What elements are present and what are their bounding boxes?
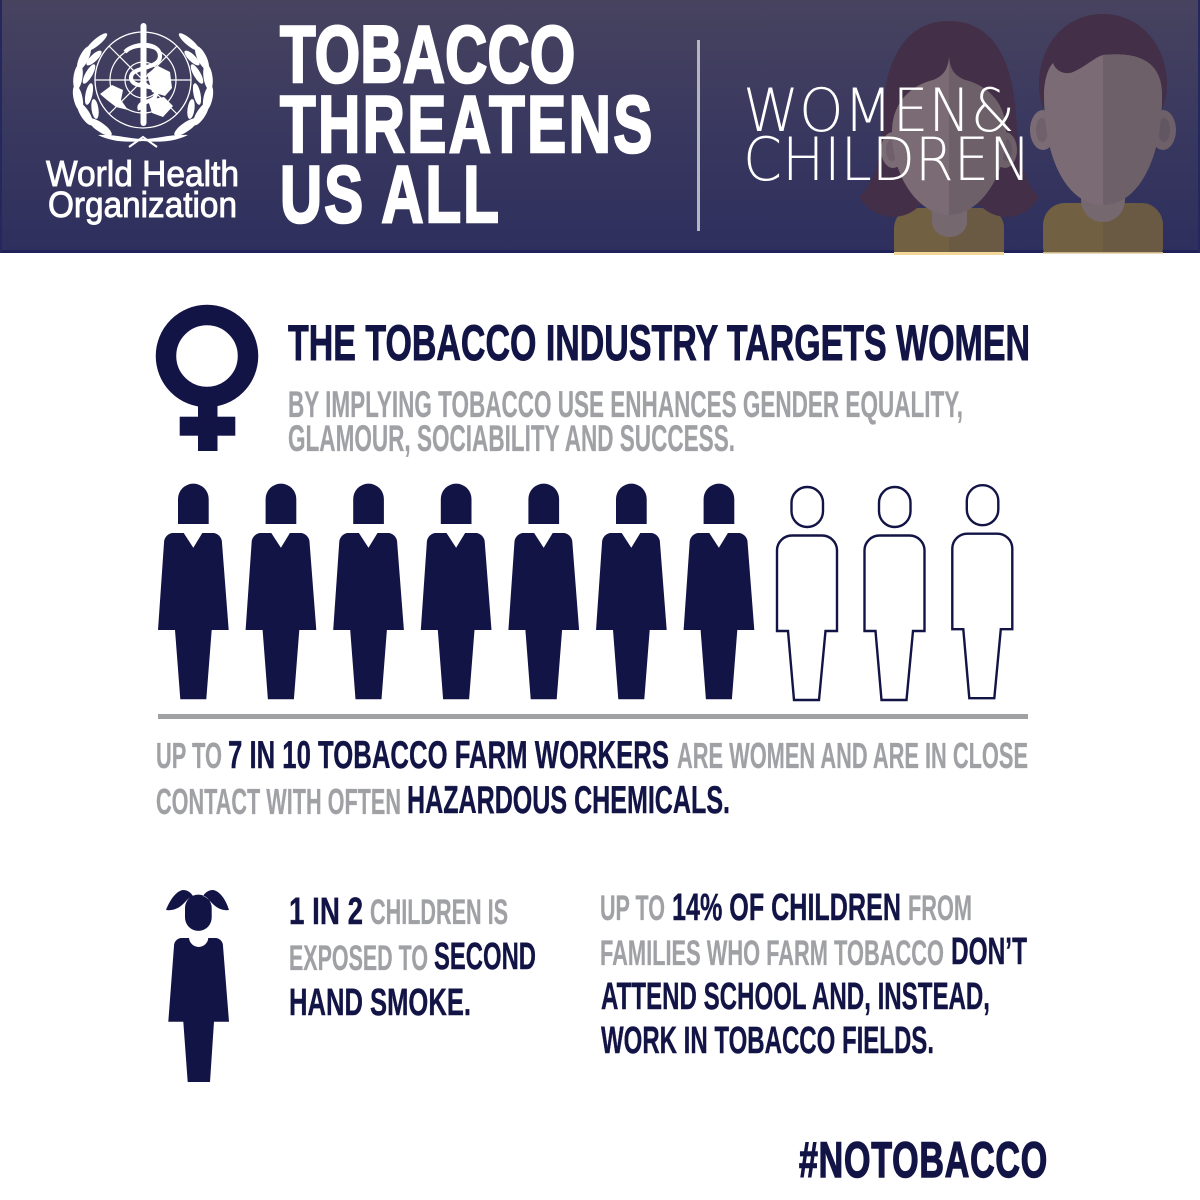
organization name — [46, 153, 239, 225]
text: children farm work — [600, 887, 1027, 1062]
woman filled 3 — [333, 484, 404, 699]
text: farm workers statistic: HAZARDOUS CHEMICALS. — [407, 779, 730, 822]
person outline 9 — [864, 487, 924, 700]
text: farm workers statistic — [156, 734, 1028, 822]
text: farm workers statistic: CONTACT WITH OFTEN — [156, 781, 401, 822]
subtitle: women and children — [743, 76, 1031, 195]
text: second hand smoke: CHILDREN IS — [370, 893, 508, 932]
text: second hand smoke: 1 IN 2 — [289, 891, 363, 933]
text: second hand smoke: HAND SMOKE. — [289, 982, 471, 1024]
icon: girl — [166, 890, 229, 1082]
icon: female symbol — [166, 315, 248, 451]
text: children farm work: WORK IN TOBACCO FIELDS. — [601, 1020, 934, 1062]
WHO emblem — [71, 23, 215, 147]
text: children farm work: DON’T — [951, 931, 1027, 973]
text: children farm work: FROM — [908, 889, 972, 928]
hashtag: #NOTOBACCO — [799, 1133, 1047, 1189]
subtitle: women and children: WOMEN& — [743, 76, 1015, 146]
woman filled 6 — [596, 484, 667, 699]
text: children farm work: UP TO — [600, 889, 665, 928]
text: children farm work: 14% OF CHILDREN — [672, 887, 901, 929]
woman filled 1 — [158, 484, 229, 699]
woman filled 2 — [246, 484, 316, 699]
text: farm workers statistic: 7 IN 10 TOBACCO FARM WORKERS — [228, 734, 669, 777]
title: TOBACCO — [280, 9, 575, 99]
baseline rule — [158, 714, 1028, 719]
illustration: woman — [859, 21, 1039, 268]
subtitle: women and children: CHILDREN — [743, 125, 1031, 195]
text: second hand smoke — [289, 891, 536, 1024]
pictogram: 7 in 10 women — [158, 484, 1012, 700]
text: second hand smoke: EXPOSED TO — [289, 939, 428, 978]
title — [280, 9, 652, 239]
organization name: Organization — [48, 184, 237, 225]
title: US ALL — [280, 149, 499, 239]
woman filled 4 — [421, 484, 492, 699]
text: second hand smoke: SECOND — [434, 936, 536, 978]
text: children farm work: ATTEND SCHOOL AND, INSTEAD, — [601, 976, 990, 1018]
text: farm workers statistic: UP TO — [156, 735, 222, 776]
title: THREATENS — [280, 79, 652, 169]
woman filled 5 — [508, 484, 579, 699]
illustration: boy — [1030, 14, 1176, 268]
text: children farm work: FAMILIES WHO FARM TOBACCO — [600, 934, 944, 973]
subheading text — [288, 384, 963, 459]
header banner — [0, 0, 1200, 268]
person outline 10 — [952, 485, 1012, 698]
organization name: World Health — [46, 153, 239, 194]
subheading text: GLAMOUR, SOCIABILITY AND SUCCESS. — [288, 418, 735, 459]
woman filled 7 — [684, 484, 754, 699]
divider — [697, 40, 700, 231]
person outline 8 — [777, 487, 837, 700]
